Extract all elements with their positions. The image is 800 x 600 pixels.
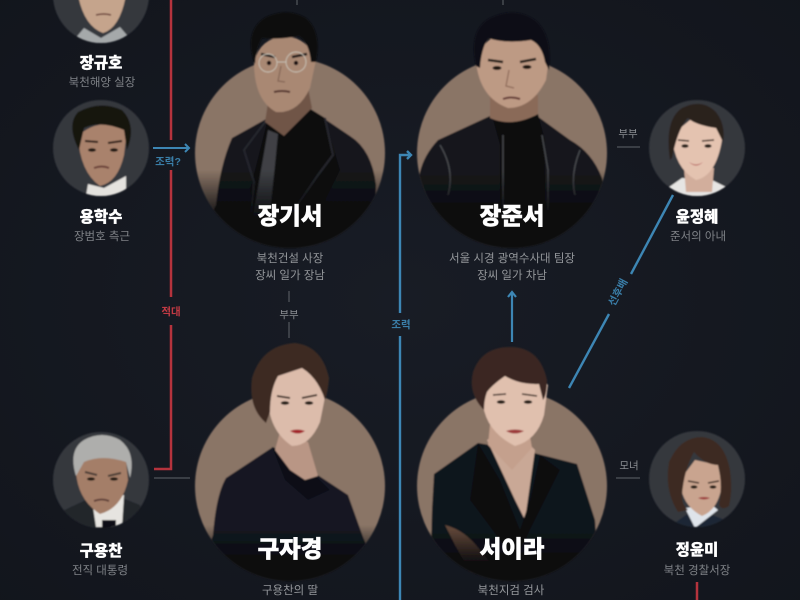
role: 구자경: 구용찬의 딸 (262, 583, 318, 597)
line: senior junior (569, 195, 673, 388)
role: 용학수: 장범호 측근 (74, 230, 130, 243)
name: 구용찬: 구용찬 (80, 542, 122, 560)
label: senior junior: 선후배 (605, 277, 630, 308)
arrow: 서이라 to 장준서 (508, 292, 516, 342)
portrait: 구용찬 (53, 432, 149, 535)
role: 장준서: 서울 시경 광역수사대 팀장 (449, 251, 575, 265)
portrait: 정윤미 (649, 431, 745, 530)
portrait: 윤정혜 (649, 100, 745, 200)
portrait: 용학수 (53, 100, 149, 196)
name: 장준서: 장준서 (480, 203, 544, 229)
role: 장준서: 장씨 일가 차남 (477, 268, 547, 282)
role: 장기서: 북천건설 사장 (257, 251, 324, 265)
name: 정윤미: 정윤미 (676, 541, 718, 559)
name: 장기서: 장기서 (258, 203, 322, 229)
label: mother daughter: 모녀 (619, 460, 639, 472)
relation lines: grey (154, 0, 640, 478)
arrow: help to 장준서 (400, 151, 411, 600)
label: rivalry: 적대 (161, 305, 181, 318)
role: 장준서 (449, 251, 575, 282)
label: couple: 부부 (279, 309, 299, 321)
role: 장규호: 북천해양 실장 (69, 75, 136, 89)
role: 장기서 (255, 251, 325, 282)
portrait: 구자경 (195, 343, 385, 590)
name: 구자경: 구자경 (258, 536, 322, 562)
portrait: 장준서 (416, 12, 608, 248)
label: help question: 조력? (155, 155, 181, 168)
portrait: 장규호 (53, 0, 149, 44)
label: help: 조력 (391, 318, 411, 331)
role: 정윤미: 북천 경찰서장 (664, 563, 731, 577)
name: 장규호: 장규호 (80, 54, 122, 72)
name: 윤정혜: 윤정혜 (676, 208, 718, 226)
role: 구용찬: 전직 대통령 (72, 564, 128, 577)
label: couple right: 부부 (618, 128, 638, 140)
role: 서이라: 북천지검 검사 (478, 583, 545, 597)
role: 윤정혜: 준서의 아내 (670, 230, 726, 243)
portrait: 장기서 (194, 12, 386, 248)
arrow: help to 장기서 (153, 144, 189, 152)
relation line: red rivalry (154, 0, 697, 600)
name: 용학수: 용학수 (80, 207, 122, 226)
name: 서이라: 서이라 (480, 536, 545, 562)
portrait: 서이라 (417, 347, 610, 590)
role: 장기서: 장씨 일가 장남 (255, 268, 325, 282)
